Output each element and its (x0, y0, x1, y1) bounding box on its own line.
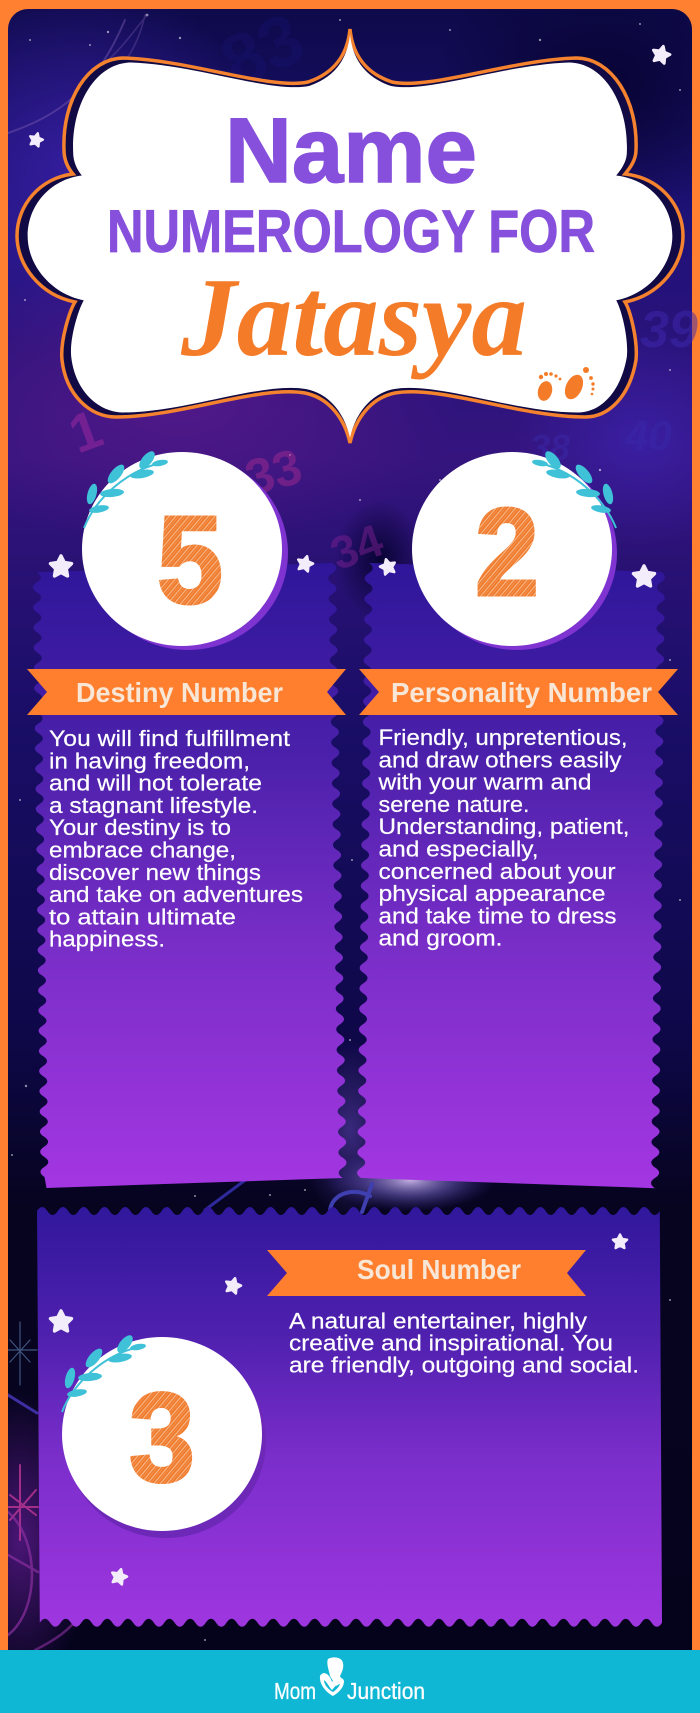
text block: personality description: concerned about your (378, 859, 616, 884)
number 3: 3 (129, 1367, 195, 1508)
faint background numbers: 1 (61, 399, 110, 465)
faint background numbers: 40 (624, 412, 672, 459)
text block: destiny description: and will not tolerate (49, 771, 262, 796)
faint background numbers: 38 (530, 427, 570, 468)
logo: MomJunction: Junction (347, 1678, 425, 1704)
text block: personality description: and especially, (378, 836, 538, 862)
personality number circle (412, 449, 617, 650)
faint background numbers (61, 0, 698, 580)
faint background numbers: 34 (324, 514, 390, 580)
icon: mother and child heart (320, 1657, 344, 1696)
text block: destiny description: and take on adventures (49, 882, 303, 907)
text block: personality description: and groom. (378, 926, 502, 951)
text block: destiny description: discover new things (49, 860, 261, 885)
ribbon: personality number: Personality Number (391, 677, 652, 708)
text block: soul description: creative and inspirational. You (289, 1330, 613, 1356)
text block: personality description: physical appearance (378, 881, 606, 906)
title: Jatasya: Jatasya (180, 256, 527, 380)
icon: leaves (84, 449, 168, 528)
logo: MomJunction: Mom (274, 1678, 316, 1704)
logo: MomJunction (274, 1657, 425, 1704)
text block: destiny description: in having freedom, (49, 748, 250, 773)
number 5: 5 (157, 492, 223, 630)
faint background numbers: 39 (640, 301, 698, 359)
icon: leaves (532, 449, 616, 528)
ribbon: destiny number: Destiny Number (76, 677, 283, 708)
text block: destiny description: a stagnant lifestyle. (49, 793, 258, 818)
destiny number circle (82, 449, 288, 650)
icon: baby feet (536, 367, 595, 402)
text block: personality description: serene nature. (378, 792, 530, 817)
ribbon: destiny number (27, 669, 346, 715)
title: Name: Name (225, 100, 477, 202)
faint background numbers: 33 (239, 438, 308, 506)
soul number circle (62, 1333, 266, 1538)
text block: destiny description: happiness. (49, 927, 165, 952)
text block: destiny description: embrace change, (49, 838, 236, 862)
ribbon: soul number (267, 1250, 586, 1296)
text block: destiny description: Your destiny is to (49, 815, 231, 840)
faint background numbers: 83 (209, 0, 316, 104)
text block: destiny description (49, 726, 303, 952)
panel: destiny number background (33, 563, 347, 1188)
text block: destiny description: to attain ultimate (49, 904, 236, 929)
text block: personality description (377, 725, 630, 951)
text block: personality description: Friendly, unpretentious, (378, 725, 628, 750)
icon: leaves (62, 1333, 146, 1412)
text block: personality description: and draw others easily (378, 747, 622, 772)
panel: personality number background (357, 563, 665, 1188)
text block: soul description: are friendly, outgoing and social. (289, 1352, 639, 1378)
text block: personality description: Understanding, patient, (378, 814, 630, 839)
ribbon: soul number: Soul Number (357, 1254, 521, 1285)
text block: destiny description: You will find fulfillment (49, 726, 290, 751)
text block: personality description: with your warm and (377, 770, 592, 795)
panel: soul number background (37, 1207, 662, 1627)
title plaque (17, 29, 683, 443)
footer bar (0, 1650, 700, 1713)
number 2: 2 (475, 484, 539, 622)
text block: personality description: and take time to dress (378, 903, 616, 928)
ribbon: personality number (359, 669, 678, 715)
text block: soul description: A natural entertainer, highly (289, 1308, 587, 1334)
title: Numerology for: NUMEROLOGY FOR (107, 198, 595, 265)
text block: soul description (289, 1308, 639, 1378)
